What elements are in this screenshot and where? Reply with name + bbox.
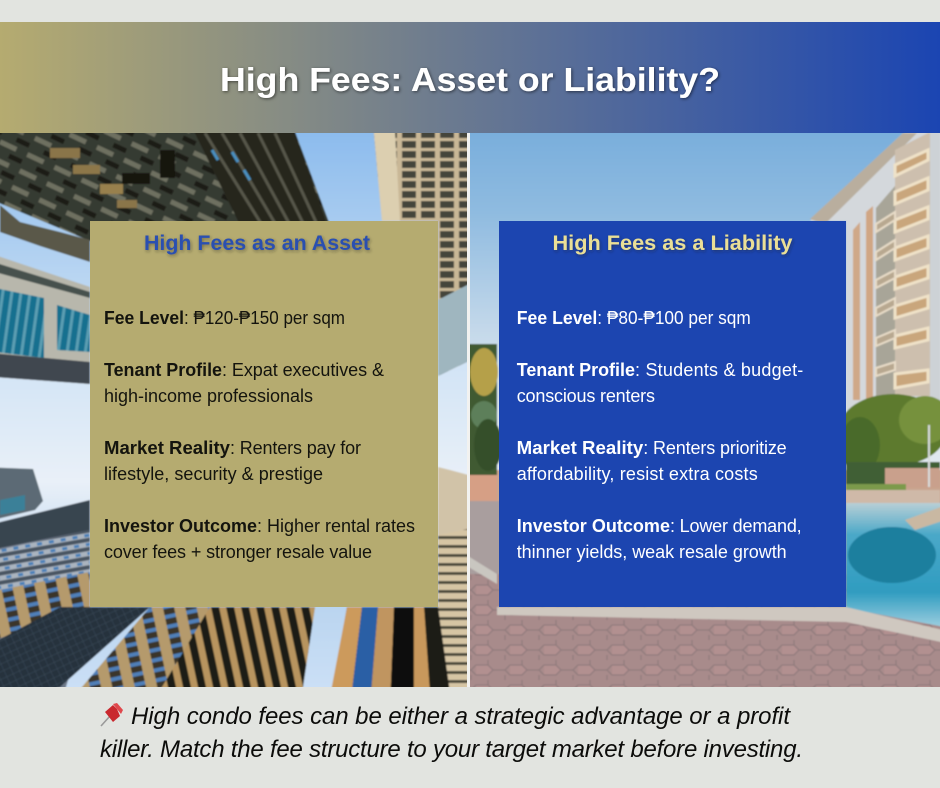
liability details: conscious renters	[517, 386, 655, 406]
takeaway text	[100, 703, 803, 763]
asset details: high-income professionals	[104, 386, 313, 406]
asset details: lifestyle, security & prestige	[104, 464, 323, 484]
liability details: Market Reality	[517, 438, 643, 458]
liability details: Tenant Profile	[517, 360, 635, 380]
balconies	[895, 150, 928, 388]
panel: high fees as an asset	[90, 221, 438, 607]
divider	[467, 133, 470, 687]
asset details: : Higher rental rates	[257, 516, 415, 536]
asset details: Tenant Profile	[104, 360, 222, 380]
liability details: Investor Outcome	[517, 516, 670, 536]
liability details: : ₱80-₱100 per sqm	[597, 308, 751, 328]
photo: towers seen from below	[0, 133, 467, 687]
asset details	[104, 308, 415, 562]
panel heading: liability: High Fees as a Liability	[552, 232, 793, 255]
icon: red pushpin	[101, 703, 123, 726]
liability details: affordability, resist extra costs	[517, 464, 758, 484]
header band	[0, 22, 940, 133]
asset details: Fee Level	[104, 308, 184, 328]
liability details: Fee Level	[517, 308, 597, 328]
asset details: cover fees + stronger resale value	[104, 542, 372, 562]
takeaway text: killer. Match the fee structure to your target market before investing.	[100, 736, 803, 763]
takeaway text: High condo fees can be either a strategic advantage or a profit	[131, 703, 791, 730]
asset details: : Expat executives &	[222, 360, 384, 380]
asset details: Investor Outcome	[104, 516, 257, 536]
liability details: : Renters prioritize	[643, 438, 787, 458]
asset details: Market Reality	[104, 438, 230, 458]
title: High Fees: Asset or Liability?	[220, 61, 720, 98]
liability details	[517, 308, 803, 562]
panel heading: asset: High Fees as an Asset	[144, 232, 370, 255]
asset details: : Renters pay for	[230, 438, 361, 458]
asset details: : ₱120-₱150 per sqm	[184, 308, 345, 328]
liability details: : Lower demand,	[670, 516, 802, 536]
panel: high fees as a liability	[499, 221, 846, 607]
photo: apartment tower and pool	[470, 133, 940, 687]
liability details: thinner yields, weak resale growth	[517, 542, 787, 562]
liability details: : Students & budget-	[635, 360, 803, 380]
